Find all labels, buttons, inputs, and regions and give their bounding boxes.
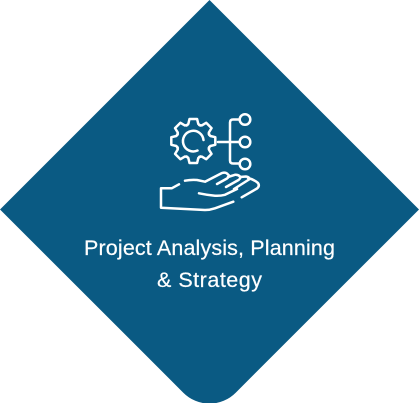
icon: gear <box>171 119 215 163</box>
heading: strategy line 2: & Strategy <box>157 268 262 292</box>
icon: open hand <box>161 173 259 210</box>
heading: project analysis line 1: Project Analysis, Planning <box>84 236 335 260</box>
icon: gear, network and open hand <box>161 114 259 210</box>
icon: network branches <box>218 114 250 169</box>
